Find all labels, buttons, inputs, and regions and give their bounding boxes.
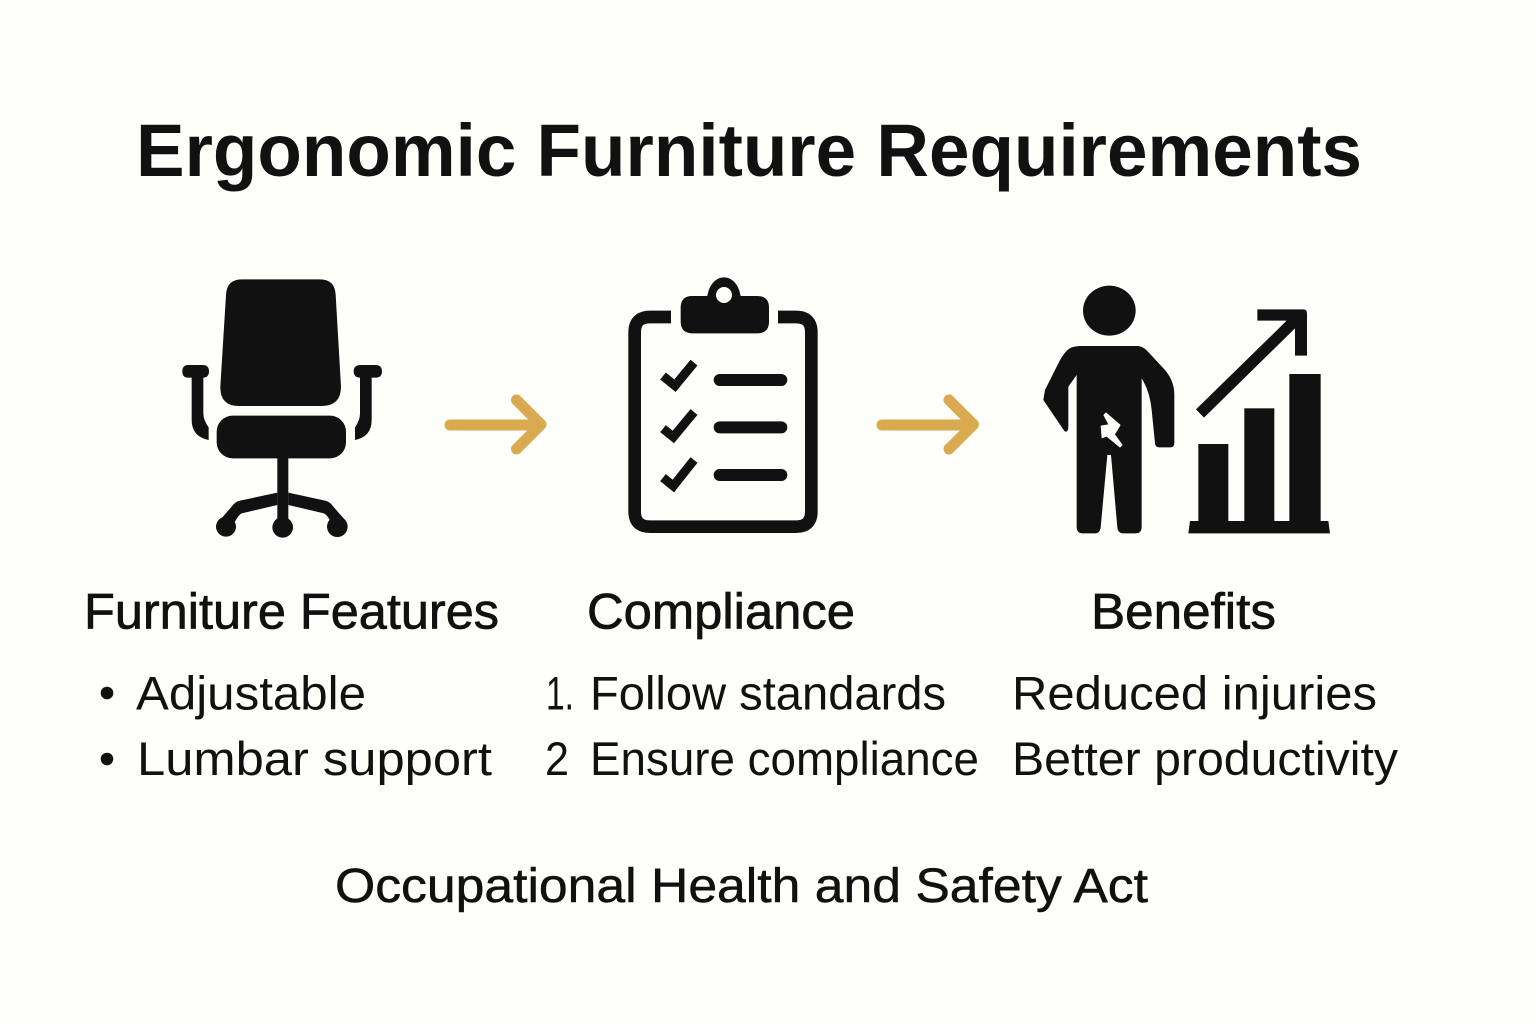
list: compliance steps: 2 (545, 732, 569, 785)
list: compliance steps: Follow standards (590, 666, 946, 720)
list: compliance steps: 1. (546, 666, 574, 720)
list: furniture features (101, 666, 492, 785)
list: compliance steps (545, 666, 979, 785)
list: benefits: Reduced injuries (1012, 666, 1377, 720)
list: furniture features: Adjustable (136, 666, 366, 720)
list: compliance steps: Ensure compliance (590, 732, 979, 785)
list: furniture features: Lumbar support (137, 732, 492, 785)
list: benefits: Better productivity (1012, 732, 1399, 785)
footer: legislation: Occupational Health and Safety Act (335, 860, 1148, 913)
heading: furniture features: Furniture Features (84, 584, 499, 640)
arrow: compliance to benefits (882, 400, 974, 449)
title: Ergonomic Furniture Requirements (136, 109, 1362, 192)
list: benefits (1012, 666, 1399, 785)
heading: compliance: Compliance (587, 584, 855, 640)
icon: person with rising bar chart (1043, 286, 1330, 533)
heading: benefits: Benefits (1091, 584, 1276, 640)
icon: office chair (182, 279, 382, 538)
icon: compliance clipboard (635, 277, 811, 527)
arrow: features to compliance (450, 400, 541, 449)
